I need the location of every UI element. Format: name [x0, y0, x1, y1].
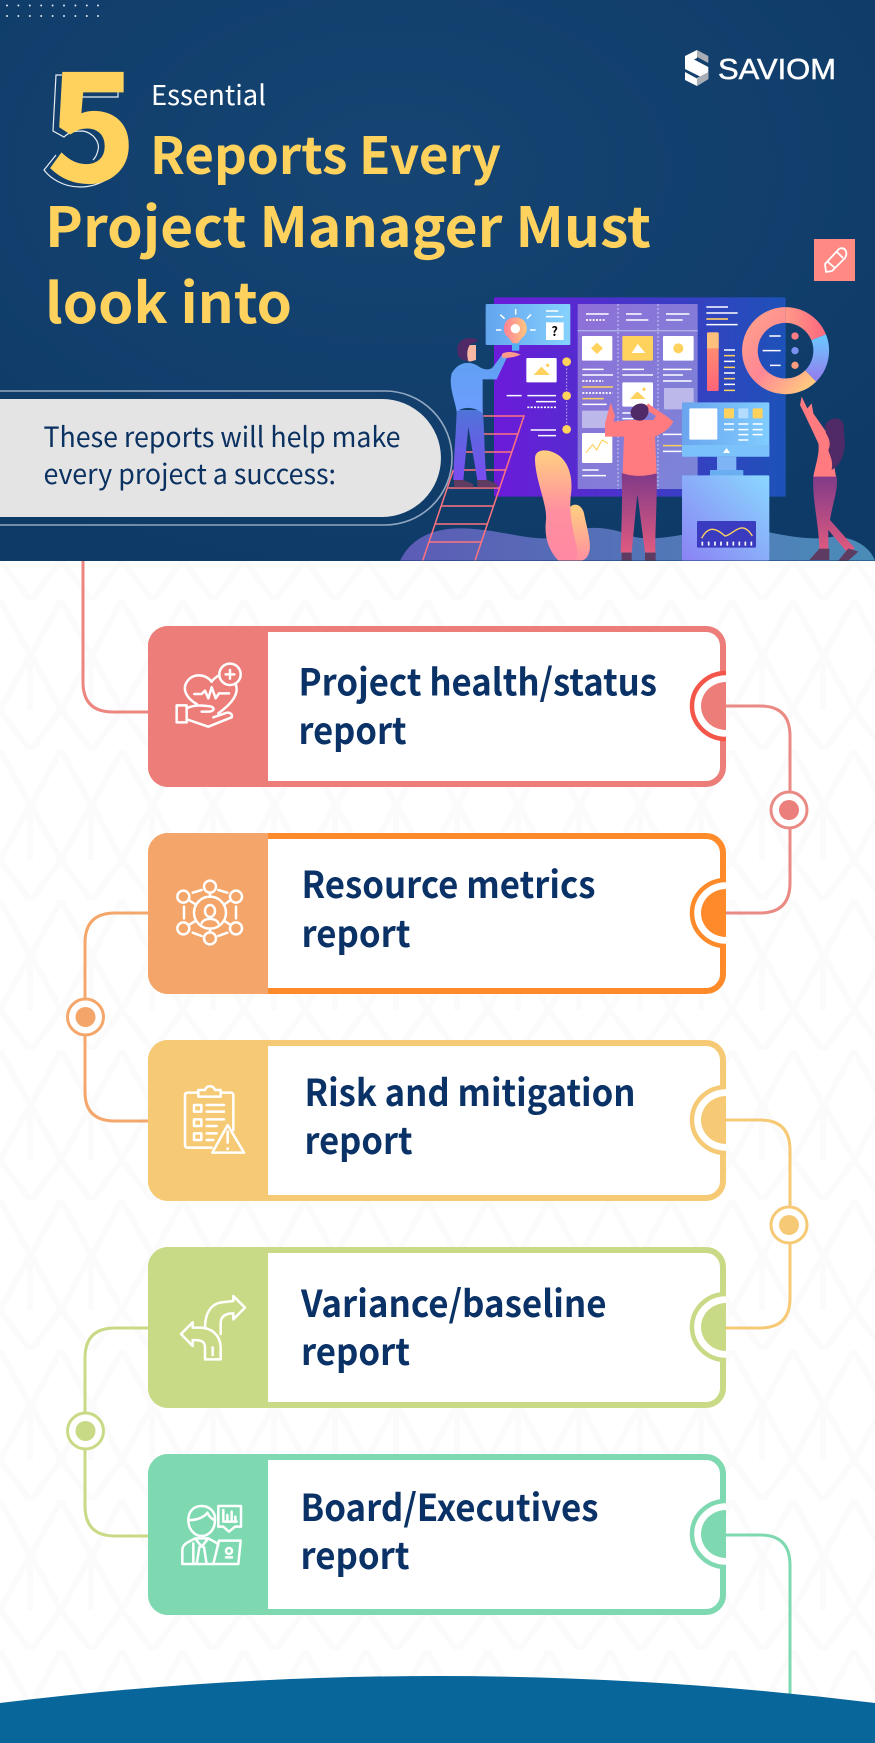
ladder — [423, 416, 524, 561]
illustration: team at project board — [400, 297, 875, 561]
card 1: project health: report — [298, 701, 406, 755]
icon: resource network — [177, 881, 242, 944]
card 5: board executives — [148, 1454, 726, 1615]
label: Resource metrics — [302, 855, 596, 909]
numeral 5 outline accent — [44, 75, 118, 187]
icon: risk clipboard — [185, 1086, 244, 1153]
intro pill: every project a success: — [44, 453, 336, 493]
kanban columns — [578, 304, 698, 489]
icon: diverging arrows — [181, 1296, 245, 1359]
intro pill — [0, 391, 452, 525]
icon: heart in hand — [177, 664, 241, 727]
page background pattern — [0, 561, 875, 1743]
notch — [692, 673, 726, 739]
idea card — [486, 304, 570, 351]
label: Variance/baseline — [300, 1274, 606, 1328]
monitor — [682, 402, 769, 561]
person on ladder — [451, 338, 521, 487]
left column details — [507, 357, 571, 436]
card 1: project health — [148, 626, 726, 787]
numeral 5: 5 — [48, 8, 136, 225]
notch — [692, 1294, 726, 1360]
notch — [692, 1501, 726, 1567]
title — [44, 8, 651, 339]
donut chart — [750, 315, 821, 386]
plant — [535, 450, 590, 561]
title: Reports Every — [150, 115, 501, 189]
title: Project Manager Must — [45, 183, 651, 263]
card 4: variance baseline — [148, 1247, 726, 1408]
header panel — [0, 0, 875, 561]
card 2: resource metrics: report — [302, 904, 410, 958]
connector: card 5 to footer — [726, 1535, 790, 1700]
board panel — [494, 297, 786, 497]
connector: card 4 to card 5 — [68, 1328, 148, 1536]
ground — [400, 528, 875, 561]
idea card: ? — [551, 321, 558, 340]
icon: pencil badge — [814, 239, 855, 281]
card 2: resource metrics — [148, 833, 726, 994]
notch — [692, 880, 726, 946]
connector: card 2 to card 3 — [68, 913, 148, 1121]
connector: intro to card 1 — [83, 561, 148, 712]
right side bar and lines — [706, 307, 738, 391]
logo: Saviom: SAVIOM — [718, 54, 836, 86]
person with hands on head — [605, 403, 673, 561]
decorative dots — [6, 4, 99, 17]
icon: executive with charts — [182, 1506, 241, 1564]
person pointing at chart — [800, 397, 858, 561]
card 5: board executives: report — [300, 1526, 410, 1580]
card 4: variance baseline: report — [301, 1322, 410, 1376]
label: Project health/status — [298, 652, 657, 706]
label: Board/Executives — [300, 1478, 598, 1532]
logo: Saviom — [685, 50, 836, 86]
footer wave — [0, 1676, 875, 1743]
card 3: risk and mitigation — [148, 1040, 726, 1201]
connector: card 1 to card 2 — [726, 706, 807, 913]
title: Essential — [151, 73, 266, 113]
notch — [692, 1087, 726, 1153]
label: Risk and mitigation — [304, 1063, 636, 1117]
intro pill: These reports will help make — [44, 416, 400, 456]
title: look into — [45, 259, 292, 339]
connector: card 3 to card 4 — [726, 1120, 807, 1328]
card 3: risk and mitigation: report — [304, 1111, 412, 1165]
